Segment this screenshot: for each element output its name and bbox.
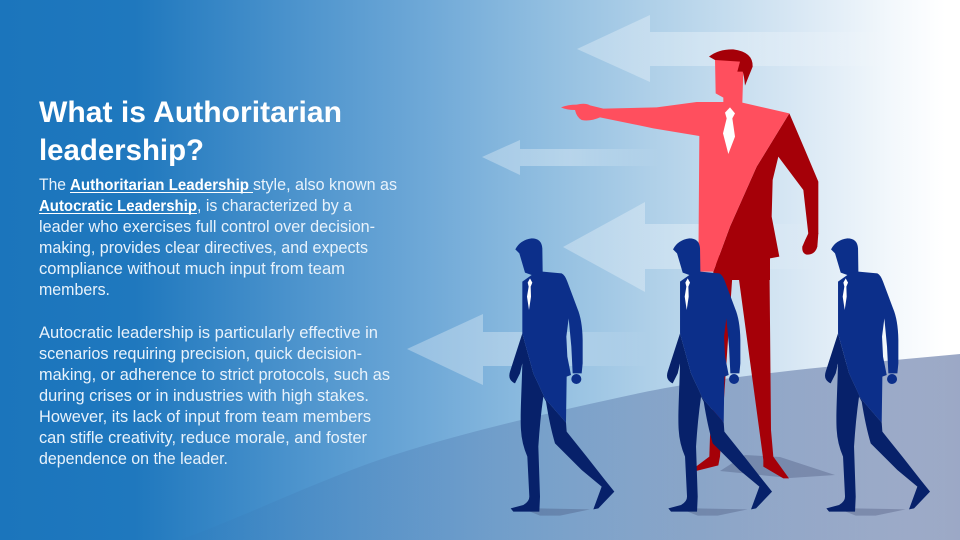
legs (825, 333, 930, 512)
arrow: top (577, 15, 900, 82)
paragraph: definition: The (39, 176, 66, 194)
ground (180, 354, 960, 540)
paragraph: definition (39, 176, 397, 299)
torso, head and pointing arm (561, 58, 789, 272)
paragraph: definition: members. (39, 281, 110, 299)
leader legs (696, 250, 789, 478)
paragraph: definition: style, also known as (253, 176, 397, 194)
figure: walker left (509, 238, 614, 516)
hair (709, 49, 753, 86)
paragraph: effectiveness: can stifle creativity, reduce morale, and foster (39, 429, 368, 447)
hand (887, 374, 897, 384)
tie (723, 107, 735, 154)
shadow (846, 508, 906, 516)
legs (509, 333, 614, 512)
paragraph: effectiveness: Autocratic leadership is particularly effective in (39, 324, 378, 342)
leader upper body (561, 49, 818, 280)
body (673, 238, 740, 423)
paragraph: effectiveness (39, 324, 390, 468)
paragraph: definition: Autocratic Leadership (39, 198, 197, 215)
legs (667, 333, 772, 512)
tie (843, 278, 848, 310)
title (39, 96, 342, 167)
arrow: second (482, 140, 660, 175)
figure: walker centre (667, 238, 772, 516)
paragraph: effectiveness: However, its lack of input from team members (39, 408, 371, 426)
tie (527, 278, 532, 310)
paragraph: definition: , is characterized by a (197, 197, 352, 215)
paragraph: effectiveness: making, or adherence to strict protocols, such as (39, 366, 390, 384)
paragraph: definition: compliance without much input from team (39, 260, 345, 278)
arrow: third (563, 202, 820, 292)
hand (571, 374, 581, 384)
paragraph: definition: Authoritarian Leadership (70, 177, 249, 194)
shadow: leader (720, 455, 835, 478)
paragraph: effectiveness: dependence on the leader. (39, 450, 228, 468)
paragraph: definition: leader who exercises full control over decision- (39, 218, 375, 236)
tie (685, 278, 690, 310)
hand (802, 233, 818, 255)
figure: walker right (825, 238, 930, 516)
paragraph: definition: making, provides clear directives, and expects (39, 239, 368, 257)
title: What is Authoritarian (39, 96, 342, 129)
paragraph: effectiveness: scenarios requiring precision, quick decision- (39, 345, 362, 363)
shadow (688, 508, 748, 516)
arrows pointing left (407, 15, 900, 385)
hand (729, 374, 739, 384)
paragraph: effectiveness: during crises or in industries with high stakes. (39, 387, 369, 405)
shadow (530, 508, 590, 516)
jacket shade and arm (713, 113, 818, 280)
body (515, 238, 583, 423)
figure: leader in red (561, 49, 818, 478)
title: leadership? (39, 134, 204, 167)
arrow: fourth (407, 314, 650, 385)
body (831, 238, 898, 423)
